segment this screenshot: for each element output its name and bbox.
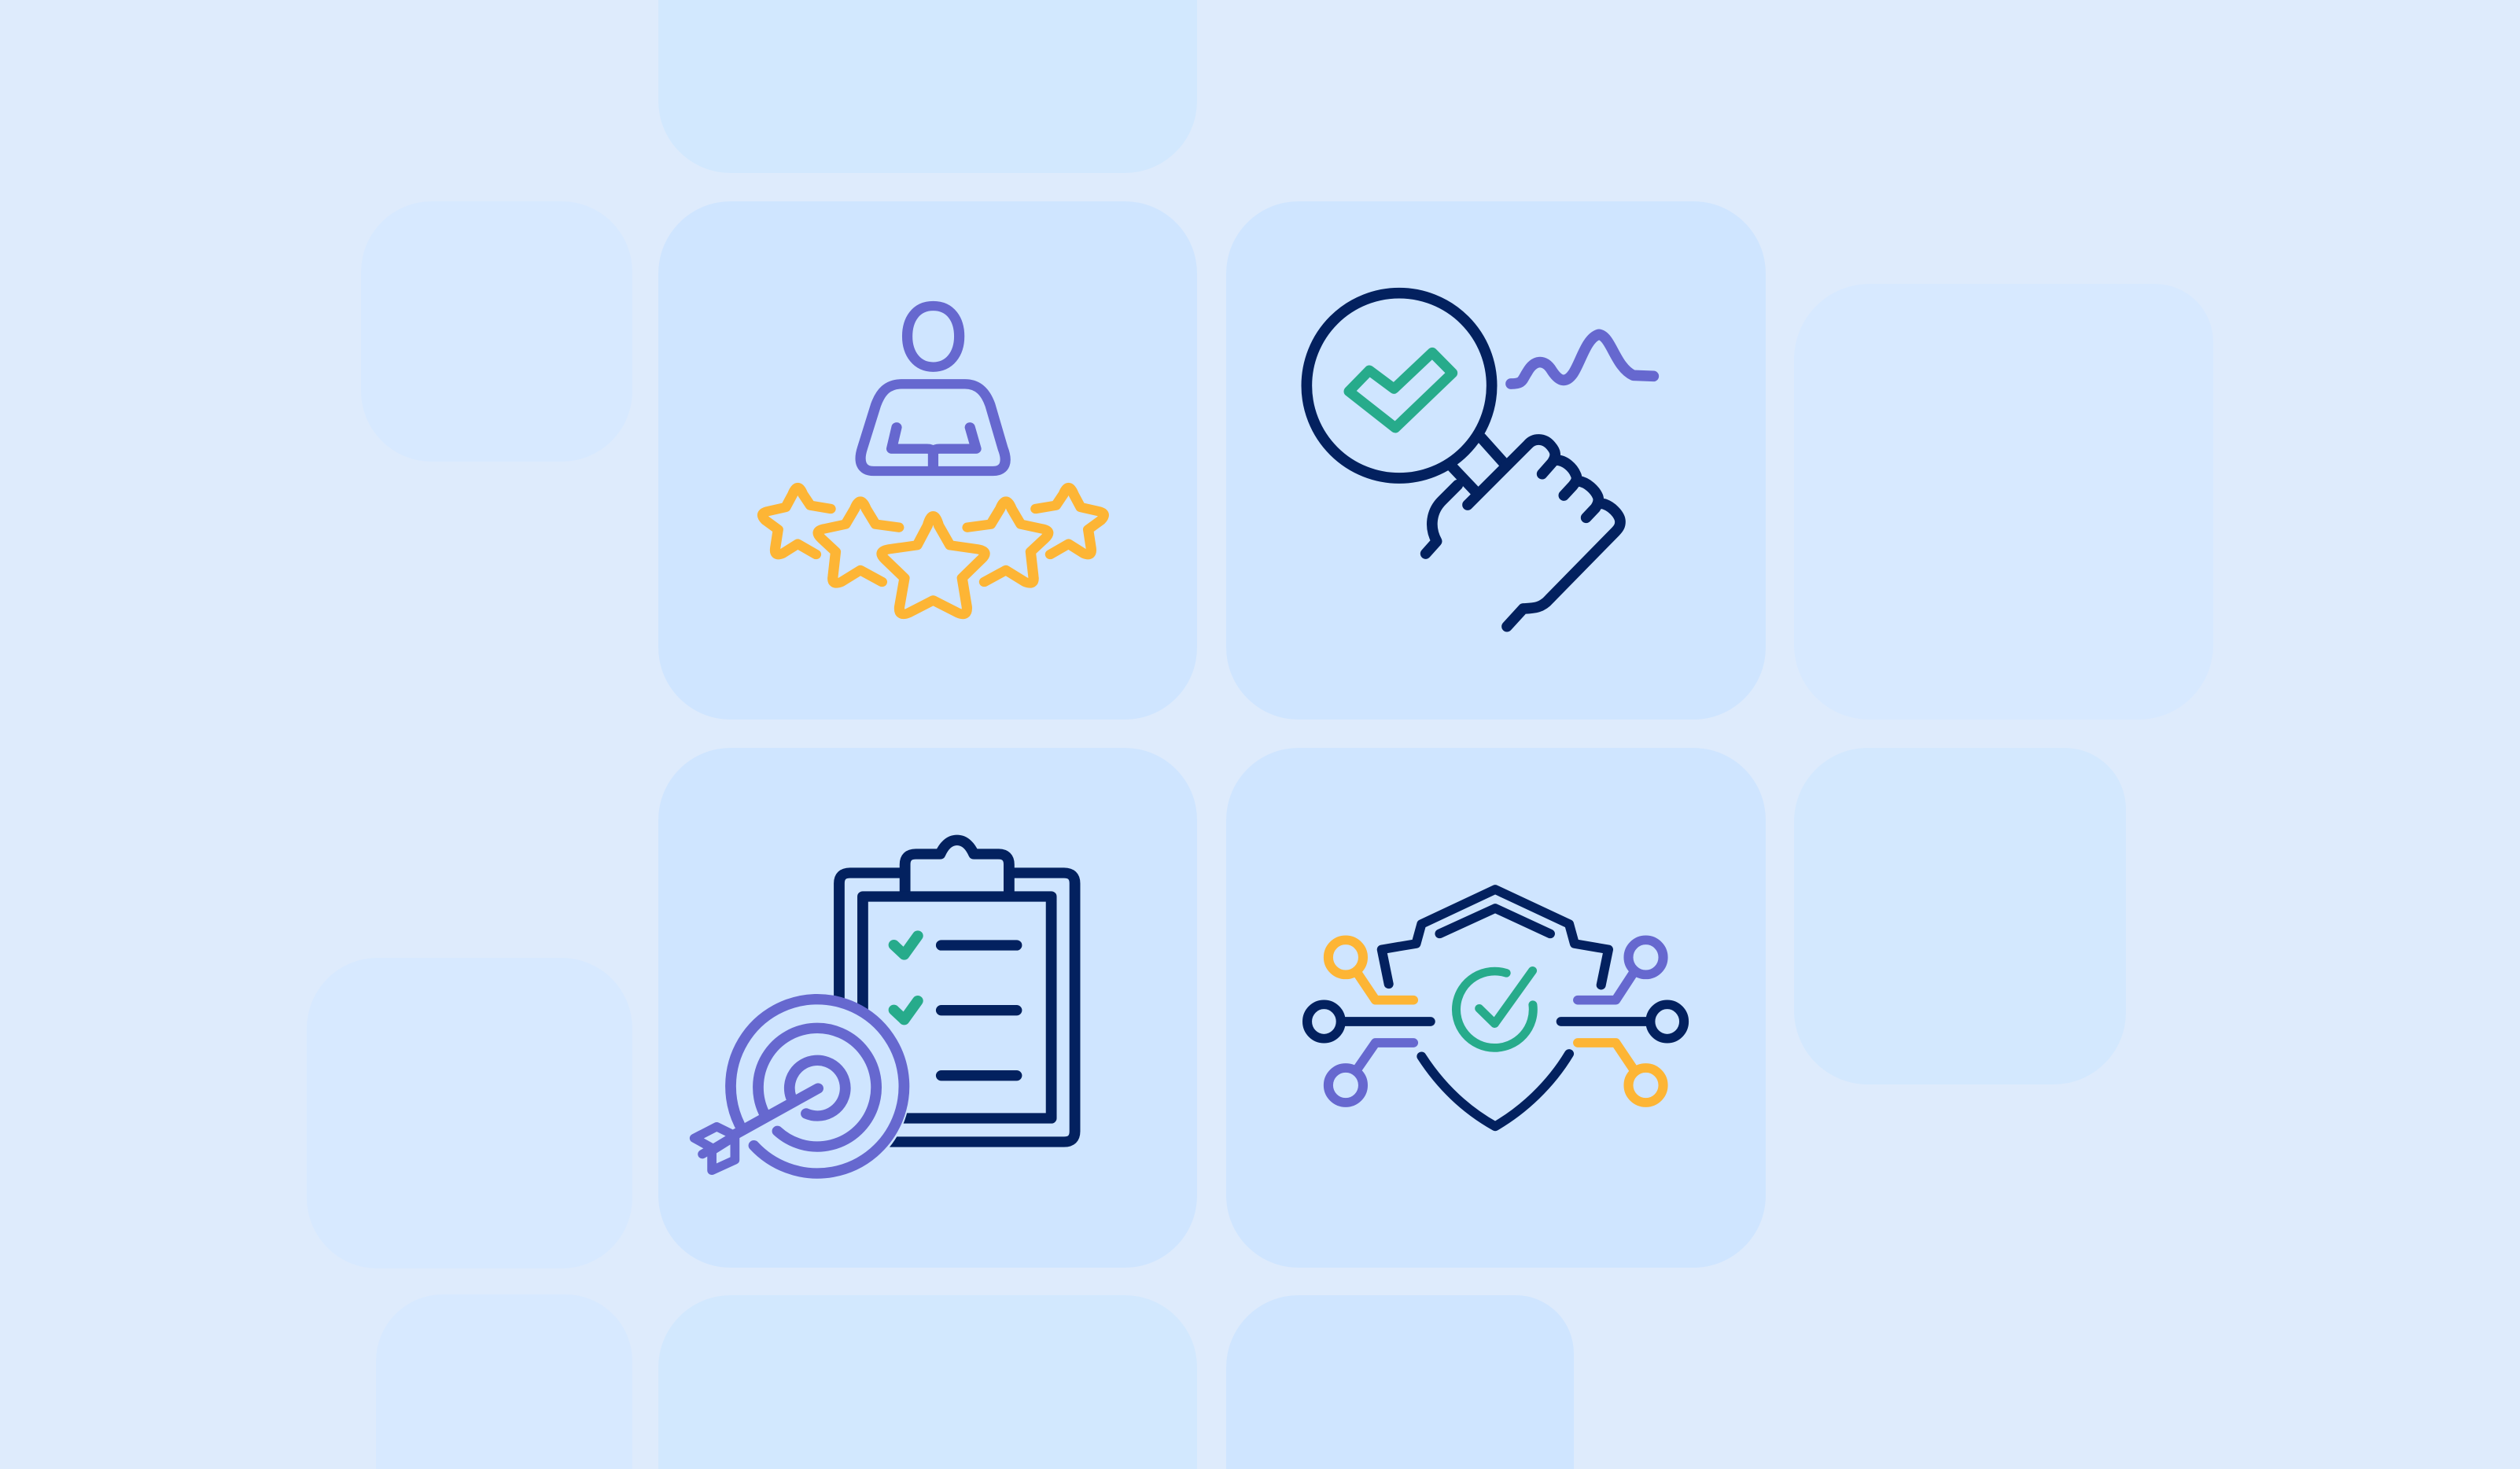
wave [1511, 334, 1653, 384]
checklist ticks [894, 936, 918, 1020]
stars [762, 488, 1103, 614]
faint tile: upper right [1794, 284, 2213, 720]
panel: inspection [1226, 201, 1766, 720]
icon: clipboard and target [694, 840, 1075, 1181]
panel: customer rating [658, 201, 1197, 720]
icon: hand holding magnifier [1306, 293, 1653, 627]
navy circuit nodes [1307, 1004, 1684, 1039]
icon: shield with circuit nodes [1307, 889, 1684, 1126]
faint tile: middle right [1794, 748, 2126, 1084]
target mask [726, 996, 910, 1181]
person [860, 306, 1005, 471]
green check [1456, 970, 1533, 1047]
clipboard [839, 840, 1075, 1142]
icon: person with five stars [762, 306, 1103, 614]
magnifier and hand [1306, 293, 1620, 627]
check mark [1349, 352, 1453, 428]
faint tile: bottom right [1226, 1295, 1574, 1469]
panel: security [1226, 748, 1766, 1268]
faint tile: bottom left [376, 1294, 632, 1469]
panel: goals checklist [658, 748, 1197, 1268]
shield [1382, 889, 1608, 1126]
yellow circuit nodes [1328, 940, 1663, 1103]
faint tile: upper left [361, 201, 632, 462]
faint tile: top centre [658, 0, 1197, 173]
purple circuit nodes [1328, 940, 1663, 1103]
faint tile: bottom centre [658, 1295, 1197, 1469]
faint tile: lower left [307, 958, 632, 1268]
target and arrow [694, 1000, 904, 1173]
